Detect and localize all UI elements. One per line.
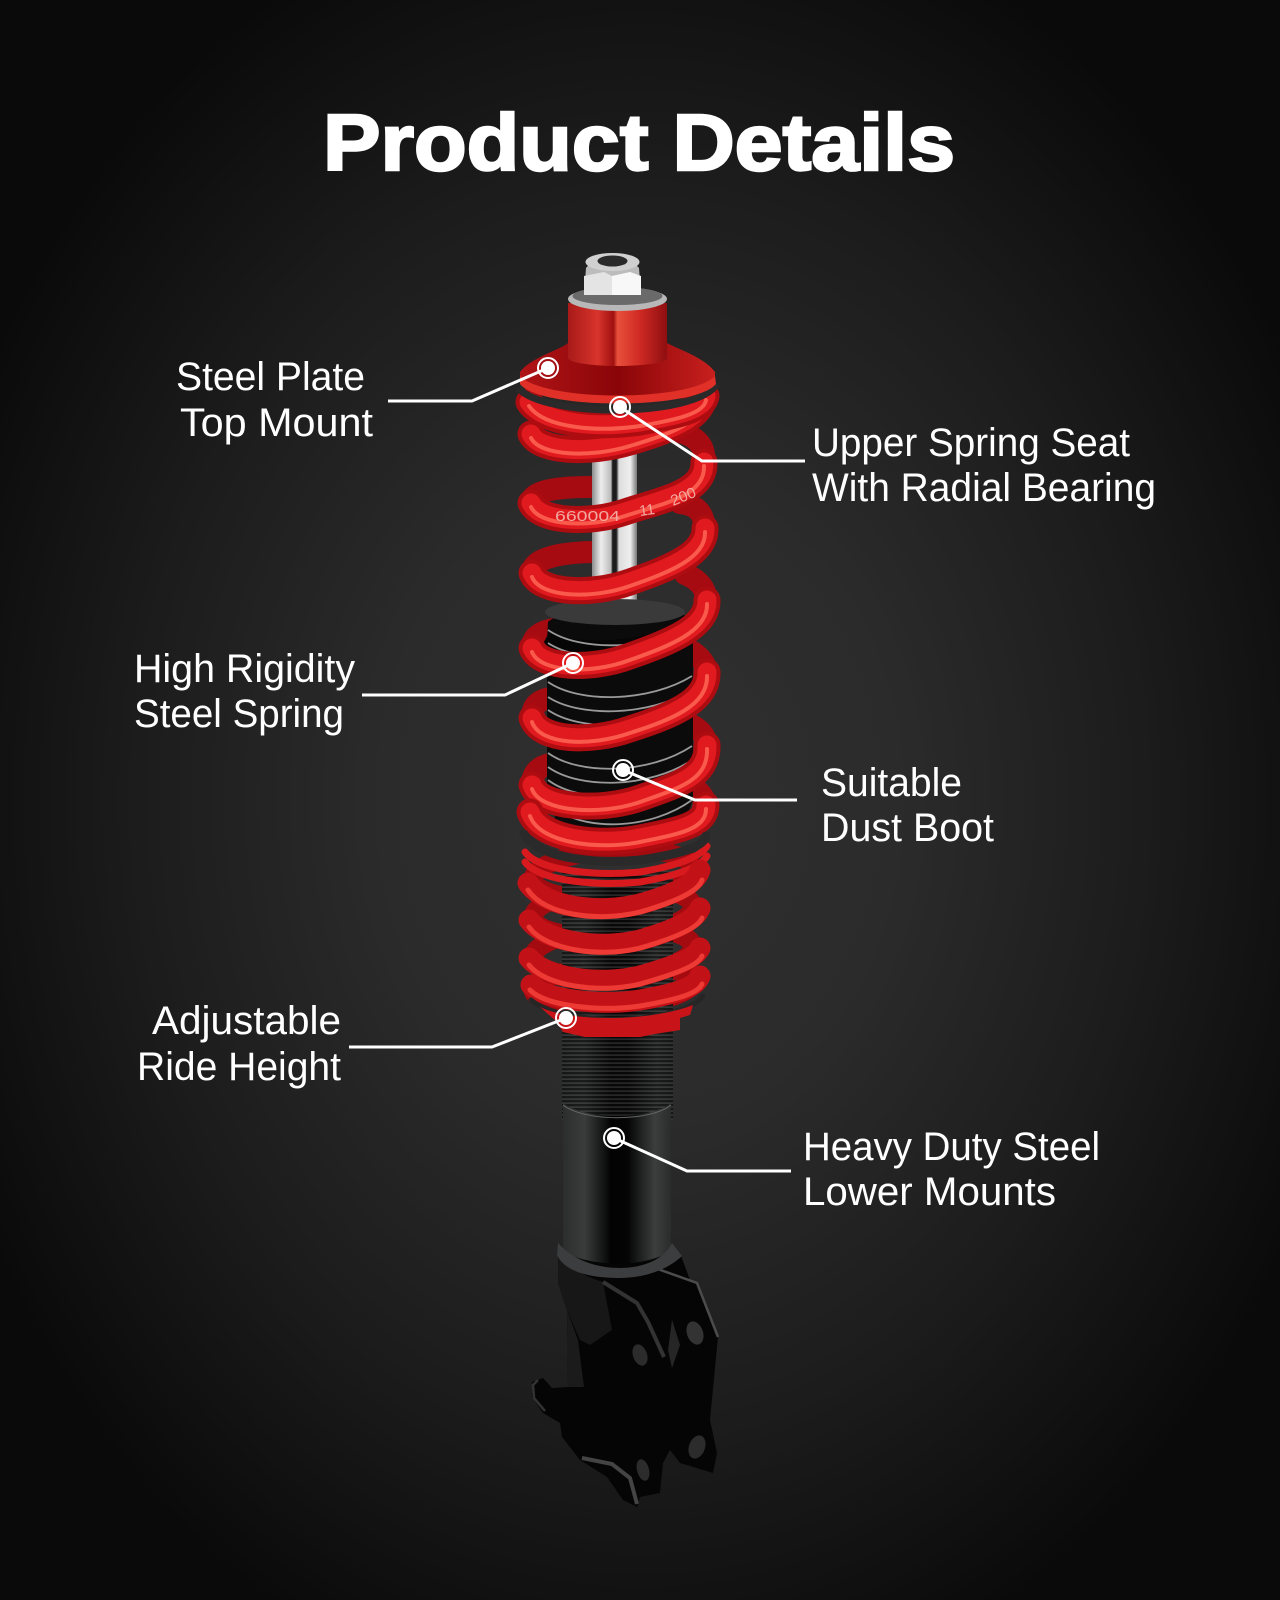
label: high rigidity steel spring: High Rigidity <box>134 647 355 691</box>
label: upper spring seat: With Radial Bearing <box>812 466 1156 510</box>
label: heavy duty steel lower mounts: Lower Mounts <box>803 1170 1056 1214</box>
coilover strut illustration <box>518 253 718 1507</box>
label: suitable dust boot: Suitable <box>821 761 962 805</box>
label: adjustable ride height: Ride Height <box>137 1045 341 1089</box>
label: upper spring seat <box>812 421 1156 510</box>
label: steel plate top mount: Top Mount <box>180 401 373 445</box>
lower damper tube <box>557 1103 682 1278</box>
label: heavy duty steel lower mounts: Heavy Duty Steel <box>803 1125 1100 1169</box>
label: steel plate top mount: Steel Plate <box>176 355 365 399</box>
callout line: suitable dust boot <box>613 760 797 800</box>
title: Product Details <box>323 98 955 187</box>
callout line: steel plate top mount <box>388 358 558 401</box>
callout line: adjustable ride height <box>349 1008 576 1047</box>
dust boot <box>545 599 693 835</box>
callout line: upper spring seat <box>610 397 805 461</box>
spring stamp text: 11 <box>638 501 656 520</box>
spring stamp text <box>555 484 699 525</box>
threaded damper body <box>562 870 673 1120</box>
lower spring rings <box>524 834 707 1019</box>
rear halves of lower spring rings <box>532 844 694 1010</box>
label: adjustable ride height <box>137 999 341 1089</box>
lower mount bracket <box>532 1253 718 1507</box>
label: high rigidity steel spring <box>134 647 355 736</box>
label: steel plate top mount <box>176 355 373 445</box>
rear spring coil segments <box>531 432 707 805</box>
label: suitable dust boot <box>821 761 994 850</box>
spring stamp text: 200 <box>668 484 699 510</box>
callout line: heavy duty steel lower mounts <box>604 1128 791 1171</box>
label: high rigidity steel spring: Steel Spring <box>134 692 344 736</box>
callout line: high rigidity steel spring <box>362 653 583 695</box>
spring stamp text: 660004 <box>555 508 620 525</box>
adjustable red collar <box>540 1005 693 1037</box>
label: heavy duty steel lower mounts <box>803 1125 1100 1214</box>
top mount <box>518 253 717 410</box>
label: adjustable ride height: Adjustable <box>152 999 341 1043</box>
label: suitable dust boot: Dust Boot <box>821 806 994 850</box>
chrome piston rod <box>592 420 637 605</box>
label: upper spring seat: Upper Spring Seat <box>812 421 1130 465</box>
front spring coils <box>529 393 707 845</box>
